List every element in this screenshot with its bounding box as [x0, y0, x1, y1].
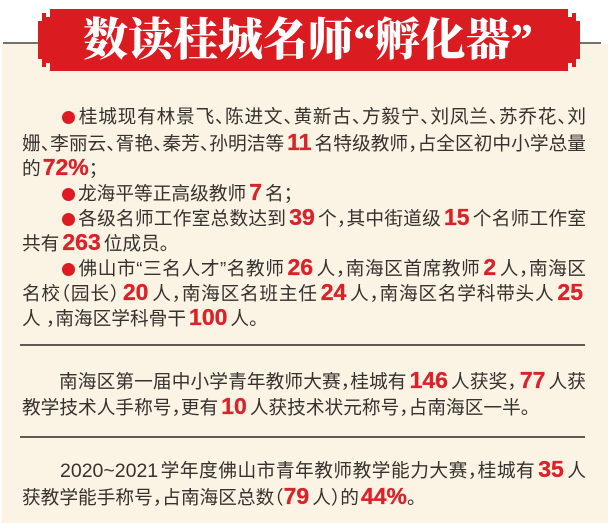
- text block: city contest: 2020~2021学年度佛山市青年教师教学能力大赛，桂城有35人: [60, 456, 586, 482]
- text block: city contest: [22, 456, 586, 509]
- divider: [20, 436, 585, 438]
- text block: city contest: 获教学能手称号，占南海区总数（79人）的44%。: [22, 483, 416, 509]
- text block: teacher statistics: 姗、李丽云、胥艳、秦芳、孙明洁等11名特级教师，占全区初中小学总量: [22, 129, 586, 155]
- heading rule right: [578, 42, 601, 44]
- bullet 2 text: 龙海平等正高级教师7名；: [78, 179, 293, 205]
- text block: teacher statistics: 的72%；: [22, 154, 98, 180]
- text block: teacher statistics: [22, 106, 586, 330]
- text block: teacher statistics: 人 ，南海区学科骨干100人。: [22, 304, 258, 330]
- title banner: [38, 9, 580, 71]
- divider: [20, 344, 585, 346]
- bullet 4 text: 佛山市“三名人才”名教师26人，南海区首席教师2人，南海区: [78, 254, 586, 280]
- text block: district contest: 南海区第一届中小学青年教师大赛，桂城有146人获奖，77人获: [59, 367, 586, 393]
- bullet 1 text: 桂城现有林景飞、陈进文、黄新古、方毅宁、刘凤兰、苏乔花、刘: [78, 106, 586, 127]
- title: 数读桂城名师“孵化器”: [83, 15, 533, 65]
- heading rule left: [3, 42, 39, 44]
- text block: teacher statistics: 共有263位成员。: [22, 229, 169, 255]
- bullet 3 text: 各级名师工作室总数达到39个，其中街道级15个名师工作室: [78, 204, 586, 230]
- text block: district contest: 教学技术人手称号，更有10人获技术状元称号，占南海区一半。: [22, 393, 530, 419]
- text block: teacher statistics: 名校（园长）20人，南海区名班主任24人，南海区名学科带头人25: [22, 279, 583, 305]
- text block: district contest: [22, 367, 586, 419]
